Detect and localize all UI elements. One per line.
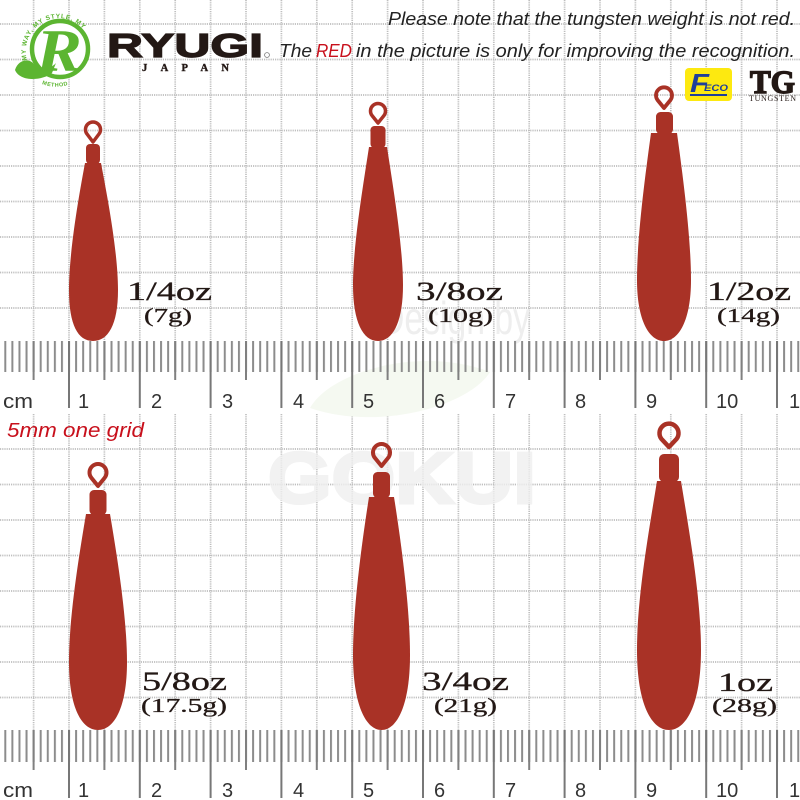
ruler: top: 3 [222, 391, 233, 413]
weight: 3/8oz [353, 104, 403, 341]
label: 1/4oz 7g [127, 277, 212, 327]
label: 1oz 28g [712, 668, 777, 717]
ruler: top: 1 [789, 391, 800, 413]
label: 3/8oz 10g: (10g) [428, 305, 493, 327]
ruler: top [0, 341, 800, 413]
label: 1oz 28g: (28g) [712, 695, 777, 717]
logo: TG tungsten: TUNGSTEN [749, 94, 796, 103]
watermark: design by: Design by [380, 292, 530, 344]
grid: upper panel [0, 0, 800, 341]
icon: Ryugi green R logo [15, 14, 90, 87]
label: 3/8oz 10g: 3/8oz [416, 277, 503, 306]
icon: FECO badge [685, 68, 732, 101]
weight: 5/8oz [69, 464, 127, 730]
label: 1/4oz 7g: 1/4oz [127, 277, 212, 306]
icon: FECO badge: F [690, 68, 710, 98]
label: 1/2oz 14g: (14g) [717, 305, 780, 327]
icon: Ryugi green R logo: METHOD [42, 80, 68, 87]
watermark: GOKUI: GOKUI [268, 439, 536, 519]
note: tungsten weight disclaimer [279, 9, 795, 61]
label: 3/4oz 21g [422, 667, 509, 717]
ruler: top: 1 [78, 391, 89, 413]
note: 5mm one grid: 5mm one grid [7, 420, 145, 442]
logo: RYUGI JAPAN [107, 27, 269, 74]
icon: Ryugi green R logo: R [35, 18, 82, 84]
logo: RYUGI JAPAN: JAPAN [142, 63, 229, 74]
ruler: top: 5 [363, 391, 374, 413]
ruler: top: 6 [434, 391, 445, 413]
label: 1/2oz 14g [707, 277, 791, 327]
weight: 1/2oz [637, 87, 691, 341]
watermark: fish [310, 361, 490, 417]
weight: 1oz [637, 424, 701, 730]
label: 1/2oz 14g: 1/2oz [707, 277, 791, 306]
ruler: top: 7 [505, 391, 516, 413]
ruler: top: 10 [716, 391, 738, 413]
label: 5/8oz 17.5g: (17.5g) [141, 695, 227, 717]
ruler: top: 2 [151, 391, 162, 413]
logo: TG tungsten: TG [750, 65, 795, 101]
note: tungsten weight disclaimer: RED [316, 41, 352, 61]
icon: FECO badge: ECO [704, 83, 728, 93]
label: 3/8oz 10g [416, 277, 503, 327]
label: 1/4oz 7g: (7g) [144, 305, 192, 327]
label: 3/4oz 21g: (21g) [434, 695, 497, 717]
ruler: bottom [0, 730, 800, 800]
ruler: top: cm [3, 391, 33, 413]
ruler: top: 4 [293, 391, 304, 413]
label: 5/8oz 17.5g [141, 667, 227, 717]
weight: 3/4oz [353, 444, 410, 730]
note: tungsten weight disclaimer: The [279, 41, 312, 61]
ruler: top: 8 [575, 391, 586, 413]
note: tungsten weight disclaimer: in the picture is only for improving the recognition. [356, 41, 795, 61]
note: tungsten weight disclaimer: Please note that the tungsten weight is not red. [388, 9, 795, 29]
label: 5/8oz 17.5g: 5/8oz [142, 667, 227, 696]
grid: lower panel [0, 414, 800, 730]
ruler: top: 9 [646, 391, 657, 413]
logo: RYUGI JAPAN: RYUGI [107, 27, 263, 64]
weight: 1/4oz [69, 122, 118, 341]
icon: Ryugi green R logo: MY WAY, MY STYLE, MY [21, 14, 86, 60]
label: 1oz 28g: 1oz [718, 668, 773, 697]
label: 3/4oz 21g: 3/4oz [422, 667, 509, 696]
